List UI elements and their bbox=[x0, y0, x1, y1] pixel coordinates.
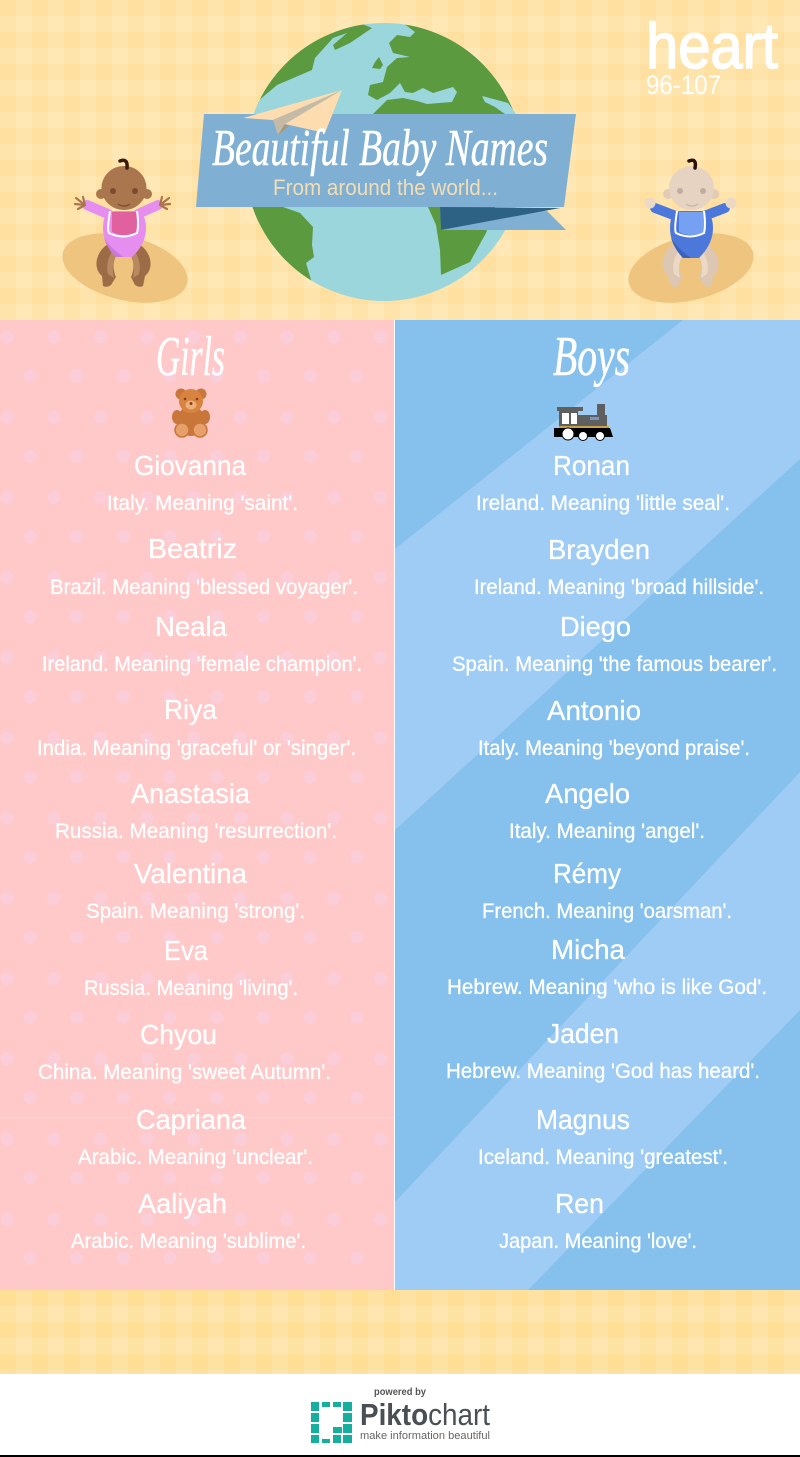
entry: Diego: Spain. Meaning 'the famous bearer'. bbox=[452, 653, 777, 676]
subtitle: From around the world... bbox=[273, 175, 498, 200]
panel: girls bbox=[0, 320, 394, 1290]
entry: Anastasia bbox=[55, 778, 337, 843]
entry: Jaden: Jaden bbox=[547, 1018, 619, 1049]
title banner bbox=[196, 114, 576, 230]
entry: Ronan: Ireland. Meaning 'little seal'. bbox=[476, 492, 730, 515]
entry: Antonio: Italy. Meaning 'beyond praise'. bbox=[478, 737, 750, 760]
hands bbox=[75, 197, 170, 209]
entry: Eva: Eva bbox=[164, 935, 208, 966]
header background bbox=[0, 0, 800, 320]
entry: Neala bbox=[42, 611, 362, 676]
entry: Chyou: China. Meaning 'sweet Autumn'. bbox=[38, 1061, 331, 1084]
illustration: baby boy bbox=[621, 160, 761, 315]
entry: Magnus: Magnus bbox=[536, 1104, 630, 1135]
footer: powered by Piktochart bbox=[0, 1374, 800, 1457]
entry: Riya: Riya bbox=[164, 694, 217, 725]
footer plaid band bbox=[0, 1290, 800, 1374]
entry: Capriana: Capriana bbox=[136, 1104, 246, 1135]
entry: Giovanna: Giovanna bbox=[134, 450, 246, 481]
powered by label: powered by bbox=[374, 1387, 426, 1398]
entry: Antonio bbox=[478, 695, 750, 760]
entry: Eva bbox=[84, 935, 298, 1000]
entry: Giovanna bbox=[107, 450, 298, 515]
entry: Micha: Micha bbox=[551, 934, 625, 965]
logo: heart 96-107: 96-107 bbox=[646, 70, 721, 100]
entry: Rémy: French. Meaning 'oarsman'. bbox=[482, 900, 732, 923]
entry: Giovanna: Italy. Meaning 'saint'. bbox=[107, 492, 298, 515]
entry: Beatriz: Beatriz bbox=[148, 533, 237, 564]
entry: Aaliyah: Aaliyah bbox=[138, 1188, 227, 1219]
entry: Brayden: Brayden bbox=[548, 534, 650, 565]
entry: Angelo bbox=[509, 778, 705, 843]
icon: train bbox=[554, 404, 613, 440]
entry: Eva: Russia. Meaning 'living'. bbox=[84, 977, 298, 1000]
entry: Ronan bbox=[476, 450, 730, 515]
entry: Ren: Japan. Meaning 'love'. bbox=[499, 1230, 697, 1253]
wordmark: Piktochart bbox=[360, 1397, 490, 1432]
illustration: baby girl bbox=[55, 160, 195, 315]
hands bbox=[644, 198, 736, 208]
entry: Rémy: Rémy bbox=[553, 858, 621, 889]
entry: Valentina: Valentina bbox=[134, 858, 247, 889]
title: Beautiful Baby Names bbox=[212, 120, 548, 177]
entry: Neala: Neala bbox=[155, 611, 227, 642]
entry: Diego: Diego bbox=[560, 611, 631, 642]
entry: Angelo: Angelo bbox=[545, 778, 630, 809]
tagline: make information beautiful bbox=[360, 1430, 490, 1442]
entry: Chyou bbox=[38, 1019, 331, 1084]
entry: Valentina: Spain. Meaning 'strong'. bbox=[86, 900, 305, 923]
entry: Aaliyah bbox=[71, 1188, 306, 1253]
entry: Capriana bbox=[78, 1104, 313, 1169]
entry: Neala: Ireland. Meaning 'female champion'. bbox=[42, 653, 362, 676]
entry: Brayden bbox=[474, 534, 764, 599]
entry: Magnus: Iceland. Meaning 'greatest'. bbox=[478, 1146, 728, 1169]
entry: Ronan: Ronan bbox=[553, 450, 630, 481]
entry: Micha: Hebrew. Meaning 'who is like God'. bbox=[447, 976, 767, 999]
entry: Jaden: Hebrew. Meaning 'God has heard'. bbox=[446, 1060, 760, 1083]
entry: Jaden bbox=[446, 1018, 760, 1083]
entry: Chyou: Chyou bbox=[140, 1019, 217, 1050]
panel: boys bbox=[395, 320, 800, 1290]
entry: Anastasia: Anastasia bbox=[131, 778, 250, 809]
heading: girls: Girls bbox=[156, 326, 225, 388]
entry: Brayden: Ireland. Meaning 'broad hillside'. bbox=[474, 576, 764, 599]
entry: Magnus bbox=[478, 1104, 728, 1169]
entry: Aaliyah: Arabic. Meaning 'sublime'. bbox=[71, 1230, 306, 1253]
entry: Ren bbox=[499, 1188, 697, 1253]
heading: boys: Boys bbox=[553, 326, 630, 388]
logo: heart 96-107: heart bbox=[646, 10, 778, 82]
entry: Rémy bbox=[482, 858, 732, 923]
entry: Beatriz bbox=[50, 533, 358, 599]
entry: Diego bbox=[452, 611, 777, 676]
entry: Angelo: Italy. Meaning 'angel'. bbox=[509, 820, 705, 843]
entry: Riya: India. Meaning 'graceful' or 'singer'. bbox=[37, 737, 356, 760]
icon: teddy bear bbox=[172, 388, 210, 437]
icon: paper plane bbox=[243, 90, 342, 135]
entry: Ren: Ren bbox=[555, 1188, 604, 1219]
entry: Riya bbox=[37, 694, 356, 760]
entry: Antonio: Antonio bbox=[547, 695, 641, 726]
entry: Micha bbox=[447, 934, 767, 999]
icon: Piktochart logo bbox=[311, 1402, 352, 1443]
globe illustration bbox=[252, 23, 516, 301]
entry: Anastasia: Russia. Meaning 'resurrection'. bbox=[55, 820, 337, 843]
entry: Beatriz: Brazil. Meaning 'blessed voyager'. bbox=[50, 576, 358, 599]
entry: Capriana: Arabic. Meaning 'unclear'. bbox=[78, 1146, 313, 1169]
entry: Valentina bbox=[86, 858, 305, 923]
